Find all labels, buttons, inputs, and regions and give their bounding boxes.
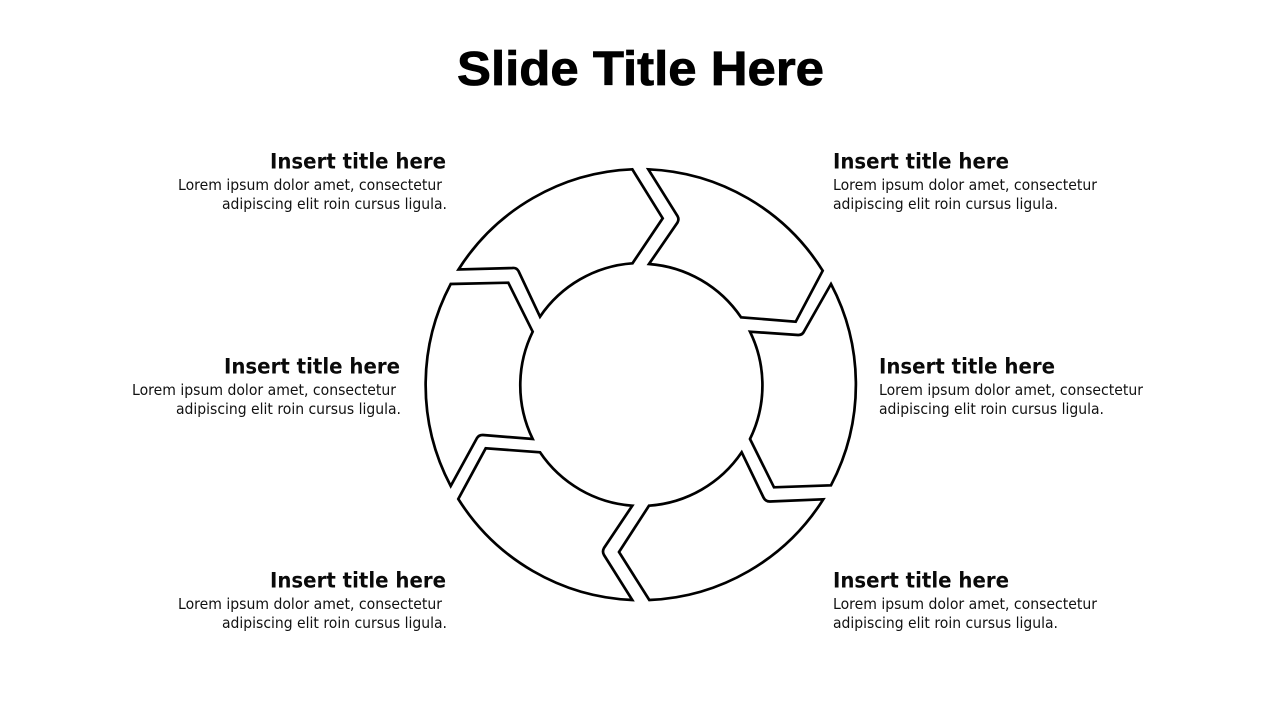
text block: bottom left bbox=[178, 568, 447, 632]
segment: upper right arrow bbox=[648, 169, 823, 322]
cycle diagram bbox=[426, 169, 856, 600]
text block: middle right bbox=[879, 354, 1144, 418]
text block: bottom right: Lorem ipsum dolor amet, consectetur bbox=[833, 596, 1098, 613]
segment: lower left arrow bbox=[458, 448, 632, 600]
text block: top right: Lorem ipsum dolor amet, consectetur bbox=[833, 177, 1098, 194]
segment: upper left arrow bbox=[458, 169, 663, 317]
text block: top right: Insert title here bbox=[833, 150, 1009, 174]
text block: top right bbox=[833, 150, 1098, 213]
text block: middle left bbox=[132, 354, 401, 418]
text block: bottom left: Lorem ipsum dolor amet, consectetur bbox=[178, 596, 443, 613]
text block: middle left: Insert title here bbox=[224, 354, 400, 378]
text block: top left bbox=[178, 150, 447, 213]
text block: top left: adipiscing elit roin cursus ligula. bbox=[222, 196, 447, 213]
text block: middle right: adipiscing elit roin cursus ligula. bbox=[879, 401, 1104, 418]
segment: lower right arrow bbox=[619, 452, 823, 600]
text block: middle right: Lorem ipsum dolor amet, consectetur bbox=[879, 382, 1144, 399]
text block: top right: adipiscing elit roin cursus ligula. bbox=[833, 196, 1058, 213]
text block: bottom left: adipiscing elit roin cursus ligula. bbox=[222, 615, 447, 632]
segment: left arrow bbox=[426, 283, 533, 486]
text block: bottom right bbox=[833, 568, 1098, 632]
text block: middle right: Insert title here bbox=[879, 354, 1055, 378]
text block: middle left: Lorem ipsum dolor amet, consectetur bbox=[132, 382, 397, 399]
text block: top left: Lorem ipsum dolor amet, consectetur bbox=[178, 177, 443, 194]
text block: top left: Insert title here bbox=[270, 150, 446, 174]
text block: bottom left: Insert title here bbox=[270, 568, 446, 592]
text block: bottom right: adipiscing elit roin cursus ligula. bbox=[833, 615, 1058, 632]
title: Slide Title Here bbox=[457, 43, 824, 96]
text block: bottom right: Insert title here bbox=[833, 568, 1009, 592]
segment: right arrow bbox=[750, 284, 856, 487]
text block: middle left: adipiscing elit roin cursus ligula. bbox=[176, 401, 401, 418]
